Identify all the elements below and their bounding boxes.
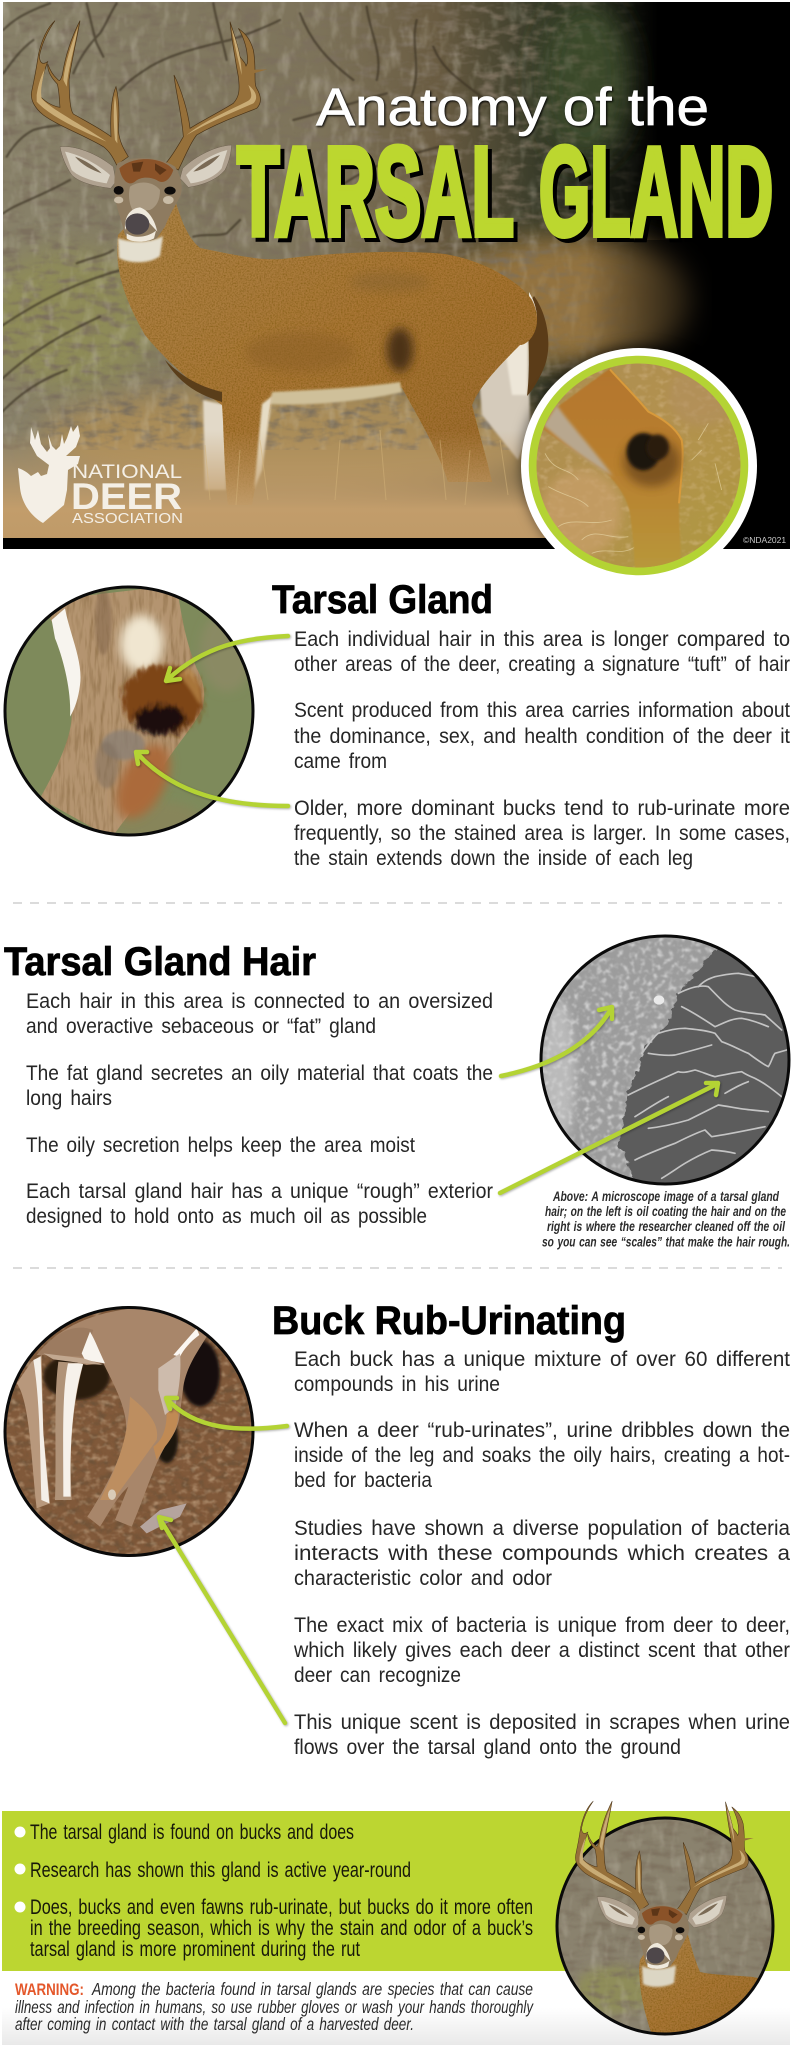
title: TARSAL GLAND: TARSAL xyxy=(237,121,514,262)
black base bar xyxy=(3,538,555,549)
warning xyxy=(15,1979,534,2034)
panel: Tarsal Gland Hair xyxy=(4,930,793,1250)
deer far legs xyxy=(203,292,548,490)
panel: key facts band xyxy=(2,1801,790,2045)
copyright note: ©NDA2021 xyxy=(743,535,786,545)
warning: WARNING: xyxy=(15,1980,84,1999)
grass fade at ground xyxy=(0,430,570,540)
bullet: rub-urinate: Does, bucks and even fawns rub-urinate, but bucks do it more often xyxy=(30,1896,533,1919)
arrow: oil xyxy=(501,1007,612,1076)
text block xyxy=(293,1348,790,1759)
portrait: buck head xyxy=(555,1801,790,2038)
header panel: hero photo and title xyxy=(0,0,793,550)
warning: Among the bacteria found in tarsal glands are species that can cause xyxy=(91,1979,533,1999)
bullet: rub-urinate: in the breeding season, which is why the stain and odor of a buck’s xyxy=(30,1917,533,1940)
bullet: found on bucks and does: The tarsal gland is found on bucks and does xyxy=(30,1821,354,1844)
inset photo: tarsal gland close-up xyxy=(513,340,757,576)
logo wordmark xyxy=(71,462,183,527)
text block: flows over the tarsal gland onto the ground xyxy=(294,1736,681,1759)
arrow: hair tuft xyxy=(166,636,288,681)
bullet: active year-round: Research has shown this gland is active year-round xyxy=(30,1859,411,1882)
arrow: ground scrape xyxy=(159,1517,285,1723)
deer head and antlers xyxy=(31,21,267,242)
photo: tarsal gland on leg xyxy=(0,585,260,845)
deer body xyxy=(117,190,537,505)
text block: characteristic color and odor xyxy=(294,1567,552,1590)
arrow: scales xyxy=(500,1083,718,1193)
buck head and antlers xyxy=(575,1801,754,1969)
text block: Studies have shown a diverse population of bacteria xyxy=(294,1517,790,1540)
text block: long hairs xyxy=(26,1087,112,1110)
bullet: rub-urinate xyxy=(14,1896,533,1961)
text block: Each tarsal gland hair has a unique “rough” exterior xyxy=(26,1180,493,1203)
hero background scrub xyxy=(0,0,793,550)
caption xyxy=(542,1189,790,1250)
panel: Buck Rub-Urinating xyxy=(0,1299,790,1759)
warning: after coming in contact with the tarsal gland of a harvested deer. xyxy=(15,2014,414,2034)
text block xyxy=(294,628,790,870)
title: Anatomy of the: Anatomy of the xyxy=(316,78,709,137)
text block: and overactive sebaceous or “fat” gland xyxy=(26,1015,376,1038)
logo wordmark: ASSOCIATION xyxy=(72,511,183,527)
text block: interacts with these compounds which creates a xyxy=(294,1542,790,1565)
bullet: rub-urinate: tarsal gland is more prominent during the rut xyxy=(30,1938,360,1961)
logo wordmark: NATIONAL xyxy=(72,462,182,483)
text block: The oily secretion helps keep the area moist xyxy=(26,1134,415,1157)
text block: The fat gland secretes an oily material that coats the xyxy=(26,1062,493,1085)
NDA logo xyxy=(18,425,183,527)
logo wordmark: DEER xyxy=(71,476,182,517)
text block: compounds in his urine xyxy=(294,1373,500,1396)
text block xyxy=(26,990,493,1228)
text block: the stain extends down the inside of each leg xyxy=(294,847,693,870)
heading: Buck Rub-Urinating xyxy=(272,1299,626,1343)
text block: Each hair in this area is connected to an oversized xyxy=(26,990,493,1013)
text block: came from xyxy=(294,750,387,773)
text block: designed to hold onto as much oil as possible xyxy=(26,1205,427,1228)
photo: buck hind legs xyxy=(0,1300,260,1560)
logo deer mark xyxy=(18,425,80,523)
heading: Tarsal Gland Hair xyxy=(4,940,316,984)
text block: When a deer “rub-urinates”, urine dribbles down the xyxy=(294,1419,790,1442)
warning: illness and infection in humans, so use rubber gloves or wash your hands thoroughly xyxy=(15,1997,534,2017)
arrow: inside of leg xyxy=(166,1398,287,1429)
text block: bed for bacteria xyxy=(294,1469,432,1492)
heading: Tarsal Gland xyxy=(272,578,493,622)
photo: microscope image of hair xyxy=(535,930,793,1190)
text block: deer can recognize xyxy=(294,1664,461,1687)
text block: Each buck has a unique mixture of over 60 different xyxy=(294,1348,790,1371)
arrow: stain xyxy=(136,752,288,806)
panel: Tarsal Gland xyxy=(0,578,790,870)
